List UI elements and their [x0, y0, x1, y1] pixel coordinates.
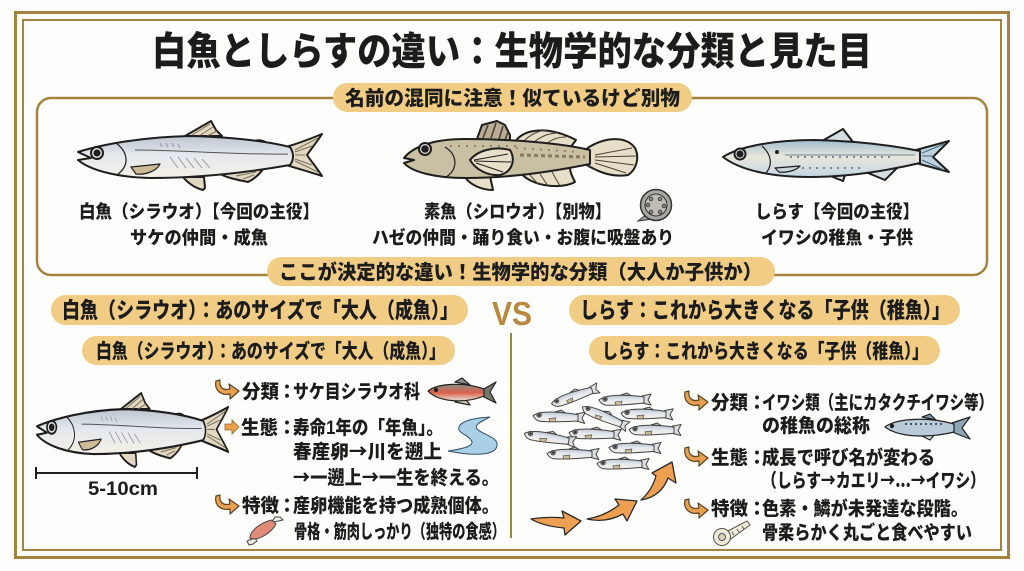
header: shirasu: しらす：これから大きくなる「子供（稚魚）」 — [580, 298, 950, 323]
ecology — [241, 416, 499, 490]
fish: shirauo — [78, 121, 322, 190]
features — [711, 497, 972, 544]
classification: の稚魚の総称 — [762, 414, 870, 437]
center divider — [510, 333, 512, 538]
features: 色素・鱗が未発達な段階。 — [762, 497, 968, 520]
ecology: ： — [748, 448, 767, 469]
fish: adult shirauo — [37, 393, 228, 467]
arrow icon: classification — [685, 391, 708, 410]
fish: shirouo goby — [404, 121, 637, 190]
features: 特徴 — [242, 494, 279, 517]
classification: ： — [748, 393, 767, 414]
scale label: 5-10cm — [88, 479, 158, 500]
classification: 分類 — [242, 381, 279, 403]
classification: ： — [278, 382, 297, 403]
VS label: VS — [492, 295, 532, 332]
subheader: shirauo: 白魚（シラウオ）：あのサイズで「大人（成魚）」 — [96, 339, 445, 363]
caption: shirouo — [372, 201, 674, 248]
arrow icon: features — [685, 499, 708, 518]
classification: 分類 — [711, 392, 748, 414]
arrow icon: ecology — [225, 420, 239, 434]
growth arrows — [531, 462, 676, 535]
icon: salmon — [428, 378, 496, 405]
panel: name confusion — [37, 83, 987, 275]
features: 骨格・筋肉しっかり（独特の食感） — [294, 520, 505, 543]
classification — [242, 380, 420, 403]
ecology: 寿命1年の「年魚」。 — [293, 416, 443, 439]
caption: shirouo: 素魚（シロウオ）【別物】 — [424, 201, 611, 222]
title: 白魚としらすの違い：生物学的な分類と見た目 — [152, 31, 872, 74]
pill heading: decisive difference: ここが決定的な違い！生物学的な分類（大人か子供か） — [279, 260, 762, 284]
ecology: 成長で呼び名が変わる — [762, 446, 935, 469]
ecology — [711, 446, 985, 493]
icon: anchovy — [885, 414, 970, 440]
subheader: shirasu: しらす：これから大きくなる「子供（稚魚）」 — [602, 339, 928, 363]
classification: サケ目シラウオ科 — [293, 380, 420, 403]
caption: shirasu — [755, 201, 919, 248]
arrow icon: features — [216, 495, 239, 514]
caption: shirauo: サケの仲間・成魚 — [130, 227, 268, 248]
features: ： — [278, 496, 297, 517]
panel: shirasu details — [523, 295, 993, 546]
icon: soft bone — [714, 521, 750, 546]
ecology: 生態 — [241, 416, 278, 439]
caption: shirauo — [79, 201, 319, 248]
fish: shirasu anchovy — [723, 129, 949, 181]
arrow icon: classification — [216, 380, 239, 399]
ecology: ： — [278, 418, 297, 439]
features: 特徴 — [711, 497, 748, 520]
features: 産卵機能を持つ成熟個体。 — [293, 494, 499, 517]
caption: shirouo: ハゼの仲間・踊り食い・お腹に吸盤あり — [372, 227, 674, 248]
caption: shirauo: 白魚（シラウオ）【今回の主役】 — [79, 201, 319, 222]
caption: shirasu: イワシの稚魚・子供 — [761, 227, 913, 248]
icon: muscle bone — [247, 517, 283, 545]
panel: shirauo details — [36, 295, 505, 545]
caption: shirasu: しらす【今回の主役】 — [755, 201, 919, 222]
icon: sucker — [638, 190, 672, 221]
features — [242, 494, 505, 543]
features: 骨柔らかく丸ごと食べやすい — [762, 521, 972, 544]
subheader: shirasu — [589, 336, 940, 365]
scale bar — [36, 467, 197, 479]
ecology: 生態 — [711, 446, 748, 469]
ecology: →一遡上→一生を終える。 — [293, 463, 499, 490]
features: ： — [748, 499, 767, 520]
classification — [711, 391, 993, 437]
arrow icon: ecology — [685, 447, 708, 466]
school of small fish — [523, 382, 681, 470]
subheader: shirauo — [82, 336, 455, 365]
pill heading: name confusion: 名前の混同に注意！似ているけど別物 — [345, 86, 680, 110]
ecology: 春産卵→川を遡上 — [293, 437, 442, 464]
header: shirauo: 白魚（シラウオ）：あのサイズで「大人（成魚）」 — [62, 298, 458, 323]
icon: river — [448, 417, 497, 454]
